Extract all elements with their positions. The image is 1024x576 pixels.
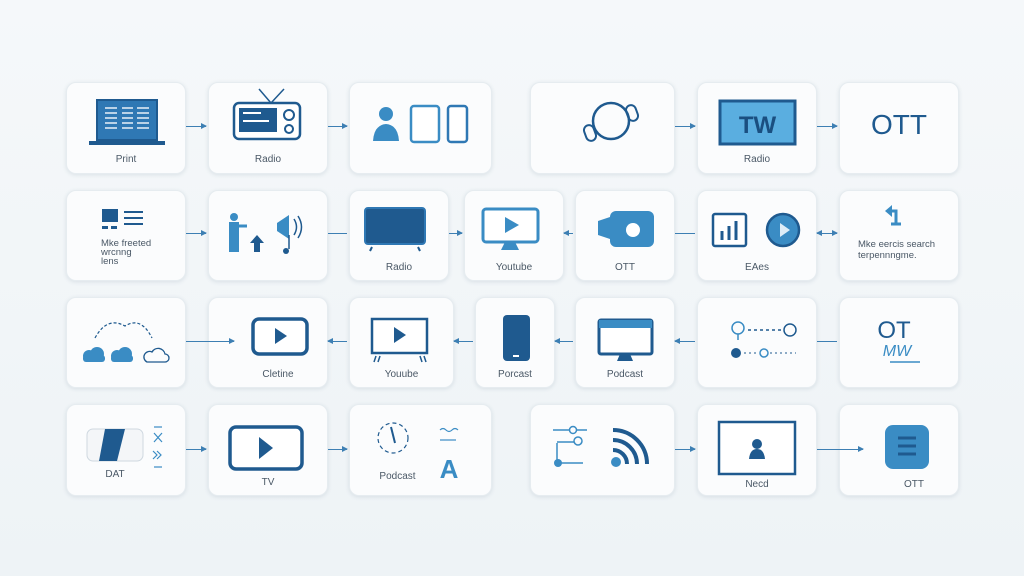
- card: Podcast monitor: [575, 297, 675, 388]
- card: TW Radio: [697, 82, 817, 174]
- icon: play big: [228, 425, 304, 471]
- label: Youtube: [496, 262, 532, 273]
- icon: ring: [582, 102, 640, 142]
- card: EAes: [697, 190, 817, 281]
- icon: desktop: [598, 318, 654, 361]
- text: MW: MW: [883, 343, 911, 360]
- card: Youube: [349, 297, 454, 388]
- icon: play monitor: [482, 208, 540, 250]
- arrow: [454, 341, 473, 342]
- label: Podcast: [379, 471, 416, 482]
- card: wifi nodes: [530, 404, 675, 496]
- card: Radio monitor: [349, 190, 449, 281]
- arrow: [328, 126, 347, 127]
- connector: [817, 341, 837, 342]
- label: Print: [116, 154, 136, 165]
- label: [858, 239, 935, 261]
- label: [101, 238, 151, 267]
- card: Cletine: [208, 297, 328, 388]
- arrow: [675, 449, 695, 450]
- icon: framed person: [718, 420, 796, 476]
- label: Mke eercis search: [858, 239, 935, 250]
- icon: blocks: [102, 209, 143, 229]
- label: Youube: [385, 369, 418, 380]
- card: Print: [66, 82, 186, 174]
- icon: person and devices: [373, 104, 468, 144]
- arrow: double: [817, 233, 837, 234]
- card: OTT menu: [839, 404, 959, 496]
- card: OT MW: [839, 297, 959, 388]
- arrow: [186, 449, 206, 450]
- icon: monitor: [364, 207, 426, 252]
- label: Cletine: [262, 369, 294, 380]
- icon: turn arrow: [885, 205, 901, 226]
- card: Porcast phone: [475, 297, 555, 388]
- label: Radio: [255, 154, 281, 165]
- icon: tv play: [370, 318, 428, 362]
- arrow: [328, 341, 347, 342]
- card: text row2: [66, 190, 186, 281]
- arrow: [675, 126, 695, 127]
- arrow: [675, 341, 695, 342]
- label: DAT: [105, 469, 125, 480]
- card: Radio TV: [208, 82, 328, 174]
- label: Necd: [745, 479, 769, 490]
- icon: menu app: [885, 425, 929, 469]
- card: devices: [349, 82, 492, 174]
- card: nodes: [697, 297, 817, 388]
- icon: eraser and symbols: [86, 426, 162, 468]
- label: Porcast: [498, 369, 532, 380]
- connector: [328, 233, 347, 234]
- icon: clouds: [83, 322, 170, 363]
- label: OTT: [615, 262, 635, 273]
- icon: person arrow speaker: [229, 213, 302, 254]
- text: OT: OT: [877, 317, 911, 344]
- card: Youtube: [464, 190, 564, 281]
- icon: signal: [553, 426, 649, 467]
- card: circle icon: [530, 82, 675, 174]
- arrow: [186, 233, 206, 234]
- arrow: [186, 341, 234, 342]
- arrow: [328, 449, 347, 450]
- card: DAT: [66, 404, 186, 496]
- icon: play: [251, 317, 309, 356]
- label: Radio: [386, 262, 412, 273]
- icon: TW screen: TW: [739, 112, 777, 139]
- label: lens: [101, 256, 118, 267]
- card: clouds: [66, 297, 186, 388]
- connector: [675, 233, 695, 234]
- icon: retro tv: [232, 88, 302, 140]
- label: TV: [262, 477, 274, 488]
- card: Podcast dial: [349, 404, 492, 496]
- label: Radio: [744, 154, 770, 165]
- text: OTT: OTT: [871, 109, 927, 140]
- arrow: [555, 341, 573, 342]
- label: Mke freeted: [101, 238, 151, 249]
- arrow: [817, 126, 837, 127]
- icon: node flow: [731, 321, 797, 358]
- icon: dial and A: A: [440, 454, 459, 484]
- card: Necd: [697, 404, 817, 496]
- label: EAes: [745, 262, 769, 273]
- label: Podcast: [607, 369, 643, 380]
- arrow: [449, 233, 462, 234]
- icon: phone: [503, 315, 530, 361]
- card: search text: [839, 190, 959, 281]
- icon: camera app: [598, 211, 654, 247]
- icon: chart and compass: [712, 212, 800, 248]
- card: TV: [208, 404, 328, 496]
- icon: dial and A: [377, 422, 459, 484]
- icon: laptop: [89, 99, 165, 145]
- arrow: [186, 126, 206, 127]
- arrow: [817, 449, 863, 450]
- arrow: [564, 233, 573, 234]
- label: wrcnng: [101, 247, 132, 258]
- card: OTT app: [575, 190, 675, 281]
- label: terpennngme.: [858, 250, 917, 261]
- card: OTT: [839, 82, 959, 174]
- icon: TW screen: [718, 100, 796, 146]
- label: OTT: [904, 479, 924, 490]
- card: person speaker: [208, 190, 328, 281]
